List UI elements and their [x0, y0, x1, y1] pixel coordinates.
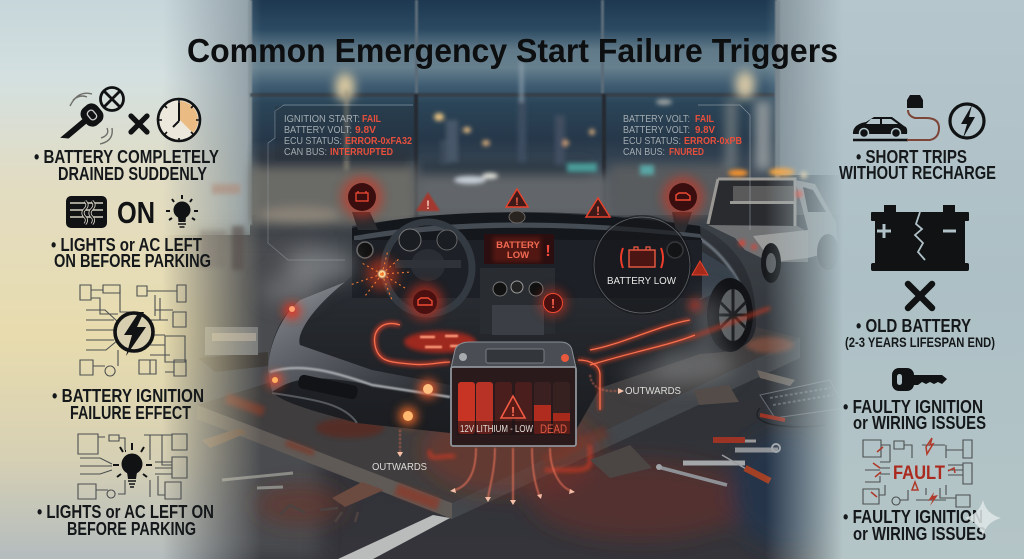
- label: battery drained: DRAINED SUDDENLY: [58, 164, 207, 184]
- center display: battery low: [484, 234, 554, 264]
- car battery: 12V LITHIUM - LOW: [460, 424, 533, 435]
- HUD panel: left diagnostics: IGNITION START:: [284, 113, 360, 125]
- label: lights left on: ON BEFORE PARKING: [54, 251, 211, 271]
- right light panel: [765, 0, 1024, 559]
- icon: warning triangle 1: [416, 192, 440, 212]
- icon: exclamation circle: !: [551, 296, 555, 311]
- label: faulty ignition: [843, 397, 986, 433]
- icon: cracked battery: [871, 205, 969, 271]
- warning icons on dashboard: [341, 176, 708, 320]
- HUD panel: left diagnostics: ERROR-0xFA32: [345, 135, 412, 147]
- label: ignition failure effect: [52, 386, 204, 423]
- panel: right triggers: [839, 95, 996, 544]
- HUD panel: right diagnostics: FAIL: [695, 113, 714, 125]
- icon: AC on bulb: ON: [117, 195, 155, 230]
- debris: [198, 327, 795, 522]
- label: lights left on 2: [37, 502, 214, 539]
- label: ignition failure effect: FAILURE EFFECT: [70, 403, 191, 423]
- dashboard: [352, 211, 702, 335]
- label: lights left on: [51, 235, 211, 271]
- battery low gauge: [592, 215, 692, 315]
- road stripe: [338, 515, 450, 559]
- smoke: [262, 247, 735, 387]
- icon: engine warning lamp: [662, 176, 704, 232]
- HUD panel: right diagnostics: BATTERY VOLT:: [623, 113, 690, 125]
- glowing lights: [268, 300, 700, 425]
- tow truck light bar: [728, 168, 808, 250]
- icon: key, cancel, times, clock: [55, 88, 200, 148]
- HUD panel: right diagnostics: 9.8V: [695, 124, 715, 136]
- HUD panel: left diagnostics: BATTERY VOLT:: [284, 124, 352, 136]
- HUD panel: right diagnostics: [623, 105, 750, 230]
- icon: car trip and bolt: [853, 95, 984, 140]
- label: faulty ignition 2: • FAULTY IGNITION: [843, 507, 983, 527]
- icon: warning triangle 2: !: [515, 196, 519, 208]
- icon: AC on bulb: [66, 195, 198, 230]
- HUD panel: right diagnostics: CAN BUS:: [623, 146, 665, 158]
- outward arrows: [372, 375, 624, 505]
- label: lights left on 2: • LIGHTS or AC LEFT ON: [37, 502, 214, 522]
- red wiring glow: [375, 308, 770, 470]
- icon: sparkle watermark: [965, 500, 1001, 536]
- car: [268, 212, 756, 433]
- floor glow: [255, 405, 850, 550]
- label: faulty ignition 2: or WIRING ISSUES: [853, 524, 986, 544]
- label: faulty ignition: • FAULTY IGNITION: [843, 397, 983, 417]
- battery cells: [458, 382, 570, 434]
- label: ignition failure effect: • BATTERY IGNITION: [52, 386, 204, 406]
- label: outwards left: OUTWARDS: [372, 461, 427, 473]
- icon: exclamation circle: [539, 289, 567, 317]
- HUD panel: right diagnostics: BATTERY VOLT:: [623, 124, 690, 136]
- HUD panel: left diagnostics: ECU STATUS:: [284, 135, 342, 147]
- concrete slab: [197, 300, 800, 559]
- icon: key: [892, 368, 947, 391]
- car battery: [451, 342, 576, 446]
- left light panel: [0, 0, 262, 559]
- label: faulty ignition 2: [843, 507, 986, 544]
- icon: steering wheel: [384, 222, 472, 314]
- icon: circuit with bulb: [78, 434, 187, 499]
- sparks: [350, 250, 412, 300]
- label: old battery: [845, 316, 995, 350]
- label: faulty ignition: or WIRING ISSUES: [853, 413, 986, 433]
- icon: circuit with lightning: [80, 285, 186, 376]
- battery low gauge: BATTERY LOW: [607, 275, 676, 287]
- panel: left triggers: [34, 88, 219, 539]
- icon: warning triangle 2: [506, 189, 528, 208]
- label: lights left on: • LIGHTS or AC LEFT: [51, 235, 202, 255]
- label: lights left on 2: BEFORE PARKING: [67, 519, 196, 539]
- icon: warning triangle 1: !: [426, 198, 430, 212]
- rear wheel: [707, 278, 753, 352]
- icon: check engine circle: [407, 284, 443, 320]
- background boxes behind left panel: [200, 184, 244, 270]
- icon: center air vents and console: [357, 242, 683, 335]
- icon: warning triangle 3: [586, 198, 610, 218]
- tools on floor: [656, 380, 845, 485]
- label: battery drained: [34, 147, 219, 184]
- HUD panel: left diagnostics: INTERRUPTED: [330, 146, 393, 158]
- icon: battery warning lamp: [341, 176, 383, 230]
- title: Common Emergency Start Failure Triggers: [187, 32, 838, 69]
- HUD panel: right diagnostics: ECU STATUS:: [623, 135, 681, 147]
- HUD panel: left diagnostics: [268, 105, 415, 260]
- icon: small triangle near wheel: [692, 261, 708, 275]
- icon: warning triangle on battery: !: [511, 404, 515, 419]
- tow truck: [708, 168, 839, 283]
- HUD panel: left diagnostics: 9.8V: [355, 124, 376, 136]
- center display: battery low: !: [545, 243, 551, 260]
- center display: battery low: LOW: [507, 250, 529, 261]
- label: battery drained: • BATTERY COMPLETELY: [34, 147, 219, 167]
- car battery: DEAD: [540, 424, 567, 436]
- small gauge: [509, 211, 525, 223]
- center display: battery low: BATTERY: [496, 240, 541, 251]
- icon: cross: [908, 284, 932, 308]
- HUD panel: right diagnostics: ERROR-0xPB: [684, 135, 742, 147]
- HUD panel: right diagnostics: FNURED: [669, 146, 704, 158]
- icon: fault circuit: [863, 438, 972, 507]
- label: old battery: • OLD BATTERY: [856, 316, 971, 336]
- battery case: [451, 367, 576, 446]
- label: short trips: [839, 147, 996, 183]
- icon: fault circuit: FAULT: [893, 463, 945, 484]
- label: short trips: • SHORT TRIPS: [856, 147, 967, 167]
- HUD panel: left diagnostics: CAN BUS:: [284, 146, 327, 158]
- label: outwards right: OUTWARDS: [625, 385, 681, 397]
- HUD panel: left diagnostics: FAIL: [362, 113, 381, 125]
- icon: warning triangle 3: !: [596, 204, 600, 218]
- battery lid: [451, 342, 576, 368]
